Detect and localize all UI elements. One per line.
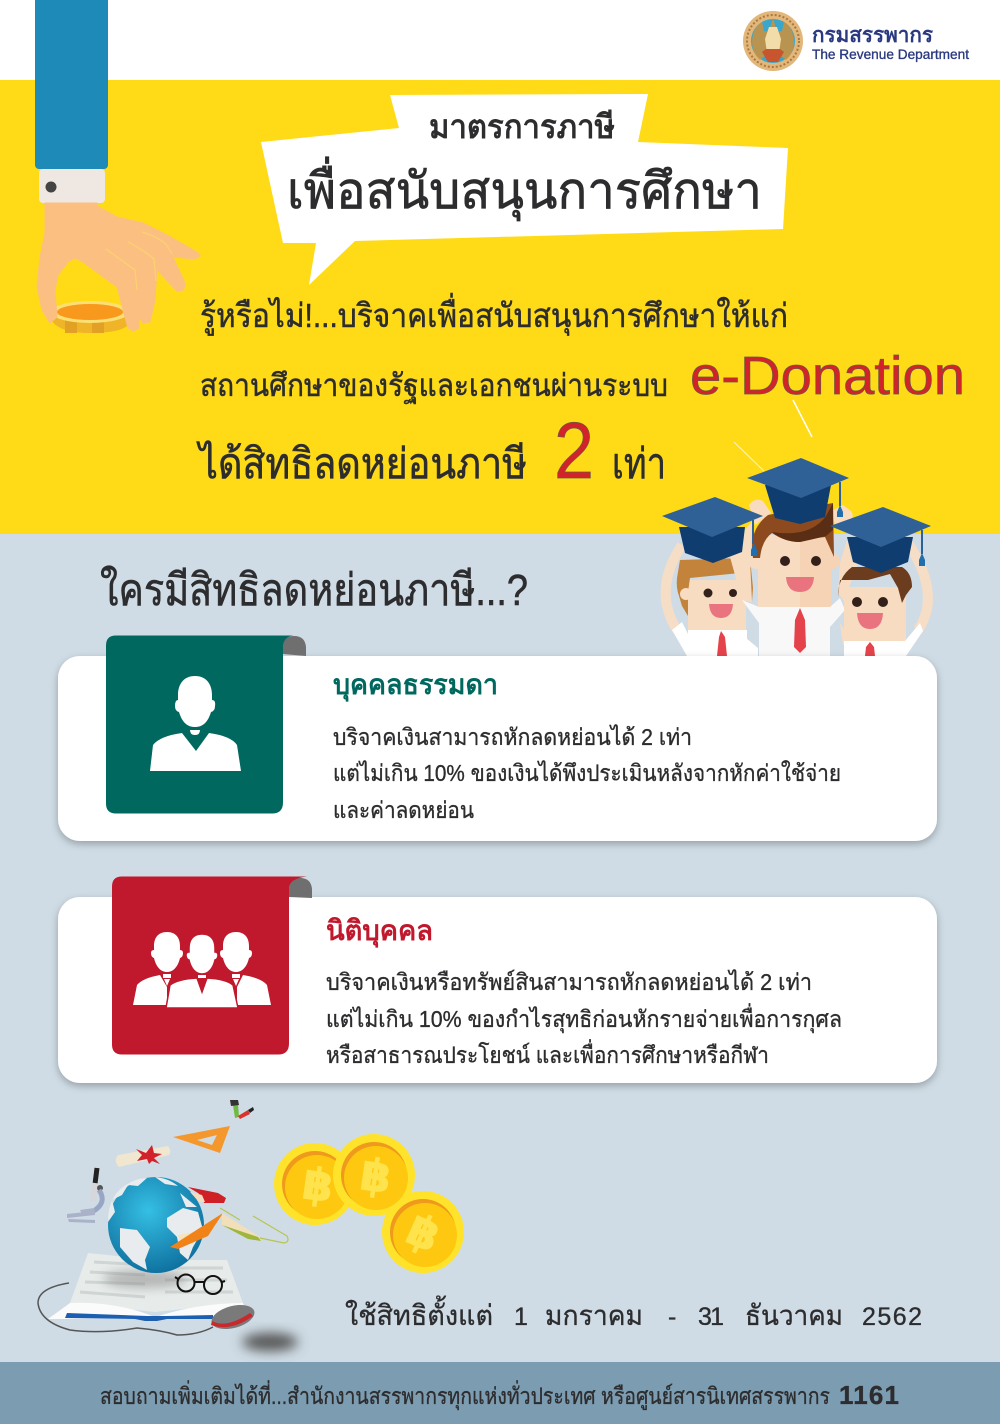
panel: individuals [58, 636, 937, 841]
text: period of use: - [668, 1303, 676, 1331]
icon: hand dropping coin [35, 0, 200, 333]
text: individuals detail: และค่าลดหย่อน [333, 797, 474, 823]
illustration: globe, book and school items [38, 1100, 298, 1351]
text: period of use [345, 1295, 922, 1331]
icon: three people [133, 932, 271, 1008]
centre student shirt [742, 598, 845, 656]
text: period of use: ธันวาคม [745, 1300, 843, 1331]
heading: who gets tax relief: ใครมีสิทธิลดหย่อนภาษี...? [100, 565, 528, 615]
text: period of use: มกราคม [545, 1300, 643, 1331]
back arm right student [908, 543, 928, 630]
book [70, 1253, 243, 1312]
logo: Revenue Department [743, 11, 969, 71]
logo: Revenue Department: The Revenue Department [812, 46, 969, 62]
text: intro line 2: สถานศึกษาของรัฐและเอกชนผ่านระบบ [200, 368, 668, 404]
centre student head [758, 535, 831, 610]
text: juristic detail [326, 969, 842, 1068]
icon: scroll tab grey [289, 878, 312, 898]
glasses [175, 1274, 225, 1294]
text: period of use: ใช้สิทธิตั้งแต่ [345, 1295, 493, 1331]
background: white header [0, 0, 1000, 80]
heading: individuals: บุคคลธรรมดา [333, 669, 498, 702]
footer bar [0, 1362, 1000, 1424]
speech bubble: title [261, 94, 788, 285]
text: period of use: 31 [698, 1303, 724, 1331]
text: individuals detail: บริจาคเงินสามารถหักลดหย่อนได้ 2 เท่า [333, 724, 692, 750]
icon tile: green [106, 636, 294, 814]
text: contact: สอบถามเพิ่มเติมได้ที่...สำนักงานสรรพากรทุกแห่งทั่วประเทศ หรือศูนย์สารนิเทศสรรพากร [100, 1380, 830, 1410]
hands behind centre cap [749, 500, 853, 525]
illustration: coins [274, 1134, 464, 1273]
globe [108, 1177, 204, 1273]
orange book [178, 1230, 205, 1244]
text: number 2: 2 [554, 406, 594, 495]
text: times: เท่า [612, 440, 666, 487]
icon: single person [150, 676, 241, 771]
green book [222, 1213, 260, 1240]
text: juristic detail: บริจาคเงินหรือทรัพย์สินสามารถหักลดหย่อนได้ 2 เท่า [326, 969, 812, 995]
caps [765, 485, 831, 524]
text: e-Donation: e-Donation [690, 346, 965, 406]
text: juristic detail: หรือสาธารณประโยชน์ และเพื่อการศึกษาหรือกีฬา [326, 1039, 769, 1068]
text: intro line 1: รู้หรือไม่!...บริจาคเพื่อสนับสนุนการศึกษาให้แก่ [200, 293, 788, 336]
markers [233, 1104, 239, 1118]
text: period of use: 1 [514, 1303, 528, 1331]
text: period of use: 2562 [862, 1303, 922, 1331]
illustration: three graduates [662, 458, 931, 656]
icon: scroll tab grey [283, 636, 306, 656]
speech bubble: title: มาตรการภาษี [429, 108, 615, 145]
right student [844, 587, 906, 643]
illustration: coins: ฿ [357, 1150, 394, 1203]
back arm left student [666, 545, 682, 630]
illustration: coins: ฿ [399, 1205, 447, 1262]
text: hotline: 1161 [839, 1380, 899, 1410]
text: individuals detail [333, 724, 841, 823]
shadow [242, 1333, 298, 1351]
icon tile: red [112, 876, 307, 1054]
mouse and cable [38, 1283, 213, 1335]
illustration: coins: ฿ [299, 1159, 337, 1212]
red book [188, 1187, 226, 1203]
heading: juristic persons: นิติบุคคล [326, 915, 433, 948]
logo: Revenue Department: กรมสรรพากร [812, 24, 934, 47]
left student [688, 580, 746, 632]
text: juristic detail: แต่ไม่เกิน 10% ของกำไรสุทธิก่อนหักรายจ่ายเพื่อการกุศล [326, 1003, 842, 1033]
text: intro line 3: ได้สิทธิลดหย่อนภาษี [196, 440, 527, 487]
decorative rays [793, 400, 812, 437]
background: yellow band [0, 80, 1000, 534]
text: individuals detail: แต่ไม่เกิน 10% ของเงินได้พึงประเมินหลังจากหักค่าใช้จ่าย [333, 760, 841, 786]
triangle ruler [173, 1126, 230, 1153]
microscope [95, 1168, 97, 1184]
speech bubble: title: เพื่อสนับสนุนการศึกษา [287, 157, 762, 221]
scroll [116, 1146, 170, 1167]
panel: juristic persons [58, 876, 937, 1083]
centre student arms [730, 520, 858, 602]
background: grey-blue band [0, 534, 1000, 1362]
tassels [753, 482, 922, 554]
